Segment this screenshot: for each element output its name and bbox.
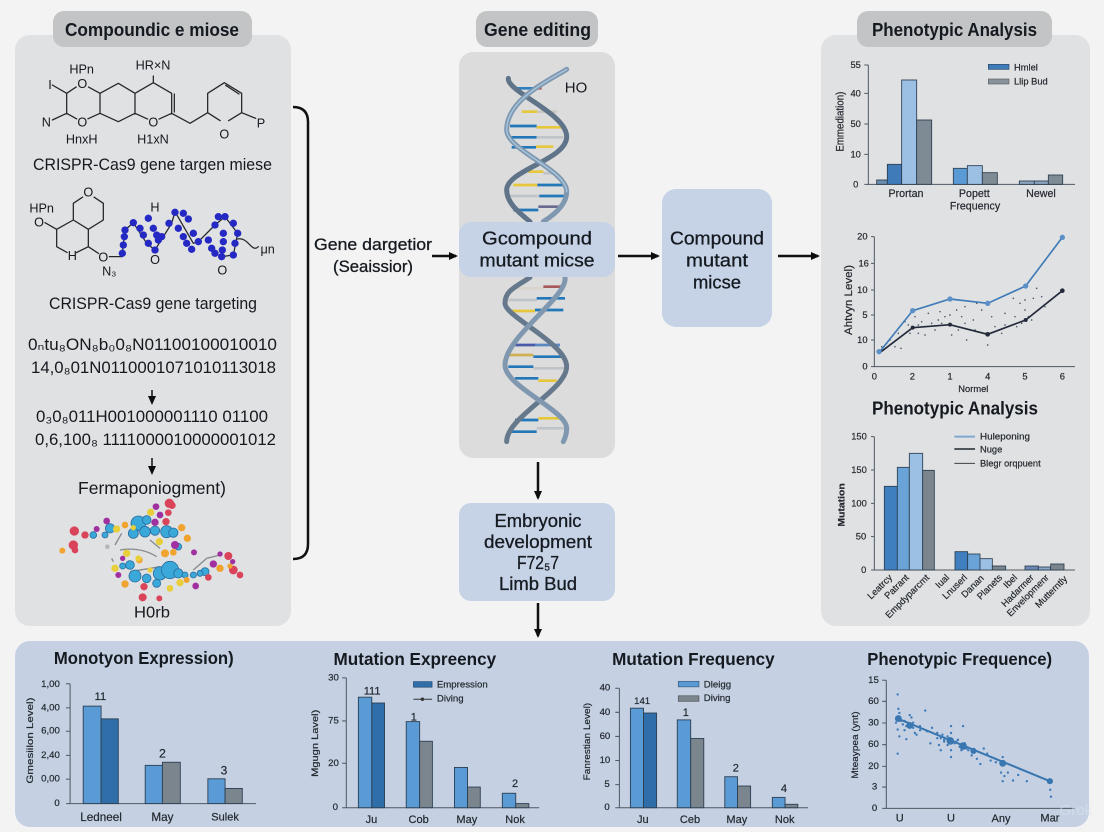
chart: mutation frequency: 60 bbox=[600, 731, 610, 742]
arrow: sequence step 2 bbox=[151, 458, 153, 473]
bar chart: bottom: Hadarmer bbox=[999, 572, 1036, 609]
heading: gene editing: Gene editing bbox=[484, 19, 591, 40]
chart: mutation expreency: 20 bbox=[328, 758, 339, 769]
binary sequence block bbox=[28, 336, 277, 449]
molecule structure 1 bbox=[42, 59, 265, 146]
chart: phenotypic frequence scatter: Phenotypic Frequence) bbox=[867, 649, 1052, 669]
molecule structure 2 with blue beads: H bbox=[68, 249, 77, 263]
chart: monotyon expression: Gmesiilon Level) bbox=[25, 698, 36, 784]
chart: monotyon expression: 1,00 bbox=[41, 679, 60, 690]
chart: mutation frequency: 1 bbox=[683, 707, 689, 719]
chart: mutation frequency: 2 bbox=[733, 762, 739, 774]
bar chart: bottom: Leatrcy bbox=[865, 572, 894, 601]
arrow: to gene editing bbox=[432, 255, 456, 257]
bar chart: top: Popett bbox=[959, 188, 990, 200]
bar chart: bottom: Nuge bbox=[980, 444, 1002, 454]
molecule structure 2 with blue beads: O bbox=[34, 216, 44, 230]
chart: mutation frequency: 5 bbox=[604, 779, 610, 790]
molecule structure 1: I bbox=[48, 78, 52, 92]
chart: phenotypic frequence scatter: 0 bbox=[872, 803, 877, 814]
chart: phenotypic frequence scatter: Any bbox=[991, 813, 1011, 825]
bar chart: bottom: Huleponing bbox=[980, 432, 1030, 442]
chart: monotyon expression: 11 bbox=[95, 691, 106, 703]
chart: phenotypic frequence scatter: 3 bbox=[872, 782, 877, 793]
molecule structure 2 with blue beads: N₃ bbox=[102, 265, 116, 279]
chart: monotyon expression: 4,00 bbox=[41, 702, 60, 713]
binary sequence block: 0ₙtu₈ON₈b₀0₈N01100100010010 bbox=[28, 336, 277, 354]
chart: mutation expreency: 111 bbox=[364, 686, 381, 698]
chart: mutation frequency: May bbox=[726, 814, 748, 826]
bar chart: top: Newel bbox=[1026, 188, 1056, 200]
chart: mutation expreency: Nok bbox=[505, 814, 525, 826]
bar chart: bottom: 150 bbox=[851, 465, 867, 475]
binary sequence block: 14,0₈01N0110001071010113018 bbox=[31, 359, 276, 377]
molecule structure 1: O bbox=[148, 116, 158, 130]
DNA double helix bbox=[505, 69, 567, 442]
watermark: Grok bbox=[1060, 802, 1093, 819]
molecule structure 1: HR×N bbox=[136, 59, 170, 73]
bar chart: top: 50 bbox=[850, 119, 861, 129]
molecule structure 2 with blue beads: O bbox=[217, 264, 227, 278]
panel: phenotypic analysis bbox=[821, 11, 1090, 626]
binary sequence block: 0,6,100₈ 1111000010000001012 bbox=[35, 431, 276, 449]
line chart: middle: 0 bbox=[862, 362, 868, 372]
label: CRISPR targeting: CRISPR-Cas9 gene targeting bbox=[49, 295, 257, 313]
bar chart: bottom: Envelopmenr bbox=[1005, 572, 1051, 618]
arrow: compound box to analysis bbox=[778, 255, 818, 257]
label: H0rb: H0rb bbox=[134, 604, 170, 622]
arrow: helix to embryonic bbox=[537, 462, 539, 498]
molecule structure 1: HPn bbox=[69, 62, 94, 76]
chart: mutation expreency: Cob bbox=[409, 814, 429, 826]
chart: mutation expreency: 2 bbox=[512, 778, 518, 790]
chart: mutation frequency: Ju bbox=[637, 814, 649, 826]
line chart: middle: 1 bbox=[947, 372, 953, 382]
label: gene targeting bbox=[314, 236, 433, 276]
chart: phenotypic frequence scatter: U bbox=[896, 812, 904, 824]
label: gene targeting: (Seaissior) bbox=[333, 258, 413, 276]
arrow: embryonic to charts bbox=[537, 603, 539, 636]
molecule structure 1: O bbox=[77, 116, 87, 130]
chart: mutation expreency: 30 bbox=[328, 672, 339, 683]
chart: phenotypic frequence scatter: 20 bbox=[868, 761, 879, 772]
line chart: middle bbox=[843, 232, 1075, 394]
chart: mutation frequency: Dleigg bbox=[704, 679, 731, 690]
bar chart: bottom: Lnuserl bbox=[940, 572, 969, 601]
chart: phenotypic frequence scatter: Mteaypea (ynt) bbox=[850, 711, 861, 779]
bar chart: bottom: 0 bbox=[861, 565, 866, 575]
bar chart: top: 40 bbox=[850, 88, 861, 98]
bar chart: top: Frequency bbox=[950, 201, 1001, 213]
chart: monotyon expression: Sulek bbox=[211, 811, 239, 823]
heading: gene editing bbox=[476, 11, 598, 47]
chart: mutation frequency bbox=[582, 649, 808, 826]
box: compound mutant mice: micse bbox=[693, 272, 741, 292]
chart: phenotypic frequence scatter: 15 bbox=[868, 675, 879, 686]
bar chart: top: 10 bbox=[850, 149, 861, 159]
line chart: middle: Ahtvyn Level) bbox=[843, 265, 855, 335]
chart: phenotypic frequence scatter: 60 bbox=[868, 739, 879, 750]
protein cluster bbox=[59, 499, 243, 601]
arrow: sequence step 1 bbox=[151, 390, 153, 403]
bar chart: bottom: Patrant bbox=[883, 572, 911, 601]
chart: mutation frequency: 141 bbox=[634, 696, 650, 707]
heading: phenotypic analysis: Phenotypic Analysis bbox=[872, 19, 1037, 40]
chart: mutation expreency: 0 bbox=[333, 802, 338, 813]
bar chart: top: 55 bbox=[850, 60, 861, 70]
line chart: middle: 10 bbox=[857, 285, 868, 295]
chart: monotyon expression: 3 bbox=[221, 764, 227, 777]
bar chart: bottom: 50 bbox=[856, 532, 866, 542]
box: compound mutant mice: Compound bbox=[670, 228, 764, 248]
bar chart: bottom: Mutation bbox=[837, 483, 847, 527]
bar chart: top bbox=[834, 60, 1075, 213]
molecule structure 2 with blue beads: μn bbox=[260, 242, 275, 256]
chart: monotyon expression: 0 bbox=[54, 798, 60, 809]
chart: monotyon expression: May bbox=[151, 811, 174, 824]
molecule structure 2 with blue beads: O bbox=[98, 250, 108, 264]
line chart: middle: 10 bbox=[857, 335, 868, 345]
line chart: middle: 4 bbox=[985, 372, 990, 382]
heading: phenotypic analysis 2: Phenotypic Analysis bbox=[872, 398, 1038, 418]
box: embryonic development: Limb Bud bbox=[499, 574, 577, 594]
chart: mutation expreency: Diving bbox=[437, 694, 464, 705]
chart: monotyon expression bbox=[25, 648, 256, 824]
chart: mutation frequency: Nok bbox=[775, 814, 795, 826]
chart: mutation expreency: Mgugn Lavel) bbox=[310, 710, 321, 777]
label: HO: HO bbox=[565, 80, 587, 96]
bar chart: top: Hmlel bbox=[1014, 62, 1038, 72]
chart: mutation frequency: Fanrestian Level) bbox=[582, 703, 593, 780]
molecule structure 1: HnxH bbox=[66, 132, 97, 146]
callout: compound mutant mice on helix: Gcompound bbox=[482, 228, 592, 248]
box: embryonic development: F72₅7 bbox=[517, 553, 559, 573]
box: compound mutant mice bbox=[662, 189, 772, 327]
chart: monotyon expression: 2,40 bbox=[41, 750, 60, 761]
line chart: middle: 5 bbox=[862, 310, 868, 320]
chart: mutation expreency: May bbox=[456, 814, 478, 826]
box: embryonic development bbox=[459, 503, 615, 601]
bar chart: top: Emmediation) bbox=[834, 92, 846, 152]
line chart: middle: Normel bbox=[958, 384, 988, 394]
molecule structure 2 with blue beads: O bbox=[150, 253, 160, 267]
chart: monotyon expression: 0,00 bbox=[41, 774, 60, 785]
chart: mutation frequency: 10 bbox=[600, 755, 610, 766]
chart: mutation frequency: Diving bbox=[704, 693, 731, 704]
line chart: middle: 0 bbox=[872, 372, 877, 382]
bar chart: bottom: Empdyparcmt bbox=[883, 572, 931, 620]
box: embryonic development: Embryonic bbox=[494, 511, 582, 531]
bar chart: bottom: Ibel bbox=[1001, 572, 1019, 590]
molecule structure 1: O bbox=[77, 77, 87, 91]
chart: phenotypic frequence scatter: 30 bbox=[868, 717, 879, 728]
label: fermentation: Fermaponiogment) bbox=[78, 478, 226, 498]
chart: phenotypic frequence scatter: 60 bbox=[868, 696, 879, 707]
bar chart: bottom bbox=[837, 432, 1075, 620]
box: embryonic development: development bbox=[484, 532, 592, 552]
arrow: helix to compound box bbox=[618, 255, 658, 257]
chart: mutation frequency: 0 bbox=[604, 802, 610, 813]
chart: mutation expreency bbox=[310, 649, 539, 826]
heading: compound mice: Compoundic e miose bbox=[65, 19, 239, 40]
chart: mutation frequency: 40 bbox=[600, 707, 610, 718]
box: compound mutant mice: mutant bbox=[686, 250, 748, 270]
panel: gene editing bbox=[459, 11, 615, 458]
chart: mutation frequency: Mutation Frequency bbox=[612, 649, 775, 669]
bar chart: bottom: 100 bbox=[851, 498, 867, 508]
chart: monotyon expression: 2 bbox=[159, 747, 166, 761]
molecule structure 1: H1xN bbox=[137, 132, 169, 146]
chart: mutation expreency: 1 bbox=[411, 711, 417, 723]
chart: phenotypic frequence scatter: Mar bbox=[1040, 812, 1060, 824]
line chart: middle: 20 bbox=[857, 232, 868, 242]
chart: monotyon expression: Ledneel bbox=[80, 811, 122, 824]
chart: monotyon expression: Monotyon Expression) bbox=[54, 648, 234, 668]
line chart: middle: 2 bbox=[910, 372, 915, 382]
chart: mutation expreency: Ju bbox=[366, 814, 377, 826]
chart: mutation frequency: 40 bbox=[600, 683, 610, 694]
chart: monotyon expression: 6,00 bbox=[41, 726, 60, 737]
bar chart: bottom: Planets bbox=[975, 572, 1004, 602]
bar chart: top: Prortan bbox=[889, 188, 924, 200]
callout: compound mutant mice on helix bbox=[459, 222, 615, 277]
chart: phenotypic frequence scatter bbox=[850, 649, 1093, 825]
molecule structure 2 with blue beads: O bbox=[83, 186, 93, 200]
line chart: middle: 5 bbox=[1022, 372, 1028, 382]
bar chart: bottom: Blegr orqpuent bbox=[980, 458, 1041, 468]
molecule structure 2 with blue beads: H bbox=[150, 201, 160, 215]
bar chart: bottom: Mutterntly bbox=[1033, 574, 1069, 610]
heading: compound mice bbox=[53, 11, 252, 47]
chart: mutation frequency: Ceb bbox=[680, 814, 700, 826]
molecule structure 1: O bbox=[219, 127, 229, 141]
chart: mutation expreency: Mutation Expreency bbox=[334, 649, 496, 669]
line chart: middle: 16 bbox=[858, 258, 869, 268]
panel: bottom charts bbox=[15, 641, 1093, 827]
molecule structure 2 with blue beads: HPn bbox=[29, 201, 54, 215]
chart: mutation expreency: Empression bbox=[437, 679, 488, 690]
binary sequence block: 0₃0₈011H001000001110 01100 bbox=[36, 408, 268, 426]
molecule structure 2 with blue beads bbox=[29, 186, 275, 279]
bar chart: bottom: Danan bbox=[959, 573, 986, 600]
bar chart: bottom: 150 bbox=[851, 432, 867, 442]
bar chart: top: Llip Bud bbox=[1014, 76, 1048, 86]
line chart: middle: 6 bbox=[1060, 372, 1065, 382]
bar chart: bottom: Iual bbox=[933, 572, 951, 590]
label: gene targeting: Gene dargetior bbox=[314, 236, 433, 254]
bracket bbox=[293, 107, 308, 559]
molecule structure 1: P bbox=[257, 116, 265, 130]
chart: mutation frequency: 4 bbox=[781, 783, 787, 795]
chart: phenotypic frequence scatter: U bbox=[947, 812, 955, 824]
panel: compound mice bbox=[15, 11, 291, 626]
bar chart: top: 0 bbox=[853, 179, 858, 189]
heading: phenotypic analysis bbox=[857, 11, 1052, 47]
callout: compound mutant mice on helix: mutant micse bbox=[480, 250, 594, 270]
label: CRISPR target mice: CRISPR-Cas9 gene targen miese bbox=[33, 156, 272, 174]
chart: mutation expreency: 75 bbox=[328, 715, 339, 726]
molecule structure 1: N bbox=[42, 116, 51, 130]
